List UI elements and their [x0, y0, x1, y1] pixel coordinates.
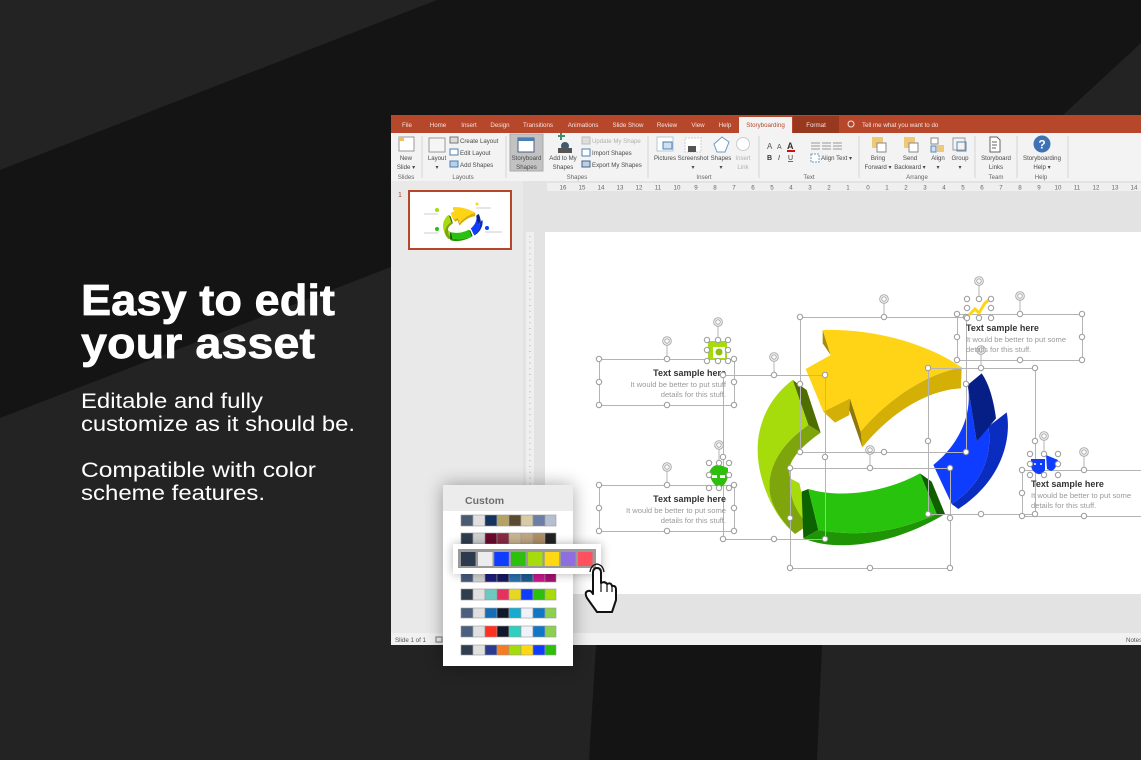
title bar with tabs: Insert — [461, 122, 477, 129]
horizontal ruler: 2 — [827, 184, 831, 192]
title bar with tabs: Transitions — [523, 122, 553, 129]
ribbon labels: Layouts — [452, 174, 474, 181]
horizontal ruler: 3 — [923, 184, 927, 192]
ribbon labels: Team — [989, 174, 1003, 181]
scheme row 2 — [461, 533, 556, 544]
ribbon labels: Pictures — [654, 155, 676, 162]
description text: customize as it should be. — [81, 413, 355, 436]
ribbon labels: Arrange — [906, 174, 928, 181]
horizontal ruler: 14 — [598, 184, 605, 192]
ribbon labels: ▾ — [435, 164, 439, 171]
horizontal ruler: 8 — [1018, 184, 1022, 192]
colour scheme picker panel — [443, 485, 601, 666]
ribbon labels: Insert — [696, 174, 712, 181]
title bar with tabs: Design — [490, 122, 510, 129]
ribbon labels: Shapes — [516, 164, 537, 171]
horizontal ruler: 12 — [1093, 184, 1100, 192]
horizontal ruler: 13 — [1112, 184, 1119, 192]
horizontal ruler: 4 — [789, 184, 793, 192]
ribbon icons: ? — [1038, 138, 1046, 152]
text block: bottom left: Text sample here — [653, 494, 726, 504]
ribbon — [391, 133, 1141, 181]
ribbon labels: ▾ — [936, 164, 940, 171]
icon: yellow growth line — [969, 300, 989, 315]
text block: top right — [966, 323, 1066, 354]
3D cycle arrows — [758, 330, 1008, 545]
ribbon labels: Slides — [398, 174, 414, 181]
scheme row 4 — [461, 572, 556, 582]
ribbon labels: Slide ▾ — [397, 164, 415, 171]
horizontal ruler: 8 — [713, 184, 717, 192]
ribbon labels: Screenshot — [678, 155, 709, 162]
thumbnail panel — [391, 181, 523, 633]
text block: top left: details for this stuff. — [661, 390, 726, 399]
horizontal ruler: 15 — [579, 184, 586, 192]
ribbon labels: Add to My — [549, 155, 578, 162]
selection boxes — [600, 285, 1141, 568]
ribbon labels: Edit Layout — [460, 150, 491, 157]
ribbon icons: A — [787, 141, 794, 151]
title bar with tabs — [391, 115, 1141, 133]
ribbon labels: ▾ — [958, 164, 962, 171]
horizontal ruler: 11 — [1074, 184, 1081, 192]
ribbon labels: Add Shapes — [460, 162, 493, 169]
text block: top left: It would be better to put stuff — [630, 380, 727, 389]
description text: Compatible with color — [81, 459, 316, 482]
scheme row 7 — [461, 626, 556, 637]
text block: top left — [630, 368, 727, 399]
horizontal ruler — [547, 183, 1141, 192]
text block: bottom right — [1031, 479, 1131, 510]
title bar with tabs: Home — [430, 122, 447, 129]
text block: bottom left — [626, 494, 726, 525]
title bar with tabs: File — [402, 122, 413, 129]
ribbon labels: ▾ — [691, 164, 695, 171]
horizontal ruler: 2 — [904, 184, 908, 192]
icon: pointing hand cursor — [586, 564, 616, 612]
heading: your asset — [81, 319, 315, 368]
ribbon labels: Storyboard — [981, 155, 1011, 162]
ribbon labels: Help ▾ — [1033, 164, 1051, 171]
ribbon labels: Group — [952, 155, 969, 162]
description text: scheme features. — [81, 482, 265, 505]
highlighted scheme row — [453, 544, 601, 574]
horizontal ruler: 0 — [866, 184, 870, 192]
vertical ruler — [526, 232, 534, 594]
ribbon labels: Link — [737, 164, 750, 171]
ribbon labels: Storyboard — [512, 155, 541, 162]
horizontal ruler: 1 — [885, 184, 889, 192]
thumbnail panel: 1 — [398, 192, 402, 199]
ribbon labels: Shapes — [711, 155, 731, 162]
ribbon labels: Links — [989, 164, 1003, 171]
ribbon labels: Insert — [735, 155, 751, 162]
title bar with tabs: Review — [657, 122, 678, 129]
selection handles — [596, 296, 1087, 571]
horizontal ruler: 3 — [808, 184, 812, 192]
ribbon labels: Update My Shape — [592, 138, 641, 145]
description text — [81, 390, 355, 505]
ribbon labels: Align — [931, 155, 945, 162]
title bar with tabs: Storyboarding — [746, 122, 785, 129]
status bar — [391, 633, 1141, 645]
ribbon labels: Import Shapes — [592, 150, 632, 157]
horizontal ruler: 16 — [560, 184, 567, 192]
scheme row 1 — [461, 515, 556, 526]
text block: bottom right: details for this stuff. — [1031, 501, 1096, 510]
ribbon labels: Backward ▾ — [894, 164, 926, 171]
scheme row 5 — [461, 589, 556, 600]
scheme row 6 — [461, 608, 556, 618]
text block: top right: details for this stuff. — [966, 345, 1031, 354]
ribbon icons: B — [767, 155, 772, 162]
heading: Easy to edit — [81, 276, 335, 325]
status bar: Slide 1 of 1 — [395, 637, 427, 644]
ribbon labels: Forward ▾ — [864, 164, 892, 171]
ribbon icons: I — [778, 155, 780, 162]
ribbon labels: Bring — [871, 155, 885, 162]
ribbon labels: Text — [803, 174, 815, 181]
text block: bottom left: It would be better to put some — [626, 506, 726, 515]
ribbon labels: Storyboarding — [1023, 155, 1061, 162]
ribbon icons: A — [767, 142, 773, 151]
horizontal ruler: 6 — [751, 184, 755, 192]
title bar with tabs: Tell me what you want to do — [862, 122, 939, 129]
title bar with tabs: View — [691, 122, 705, 129]
application window — [391, 115, 1141, 645]
text block: bottom left: details for this stuff. — [661, 516, 726, 525]
ribbon labels: Shapes — [567, 174, 587, 181]
scheme row 8 — [461, 645, 556, 655]
title bar with tabs: Slide Show — [613, 122, 644, 129]
icon: green face — [709, 465, 728, 488]
ribbon labels: ▾ — [719, 164, 723, 171]
title bar with tabs: Format — [806, 122, 826, 129]
icon: lime chart — [708, 341, 727, 360]
text block: bottom right: It would be better to put some — [1031, 491, 1131, 500]
horizontal ruler: 5 — [770, 184, 774, 192]
text block: top right: Text sample here — [966, 323, 1039, 333]
ribbon icons: U — [788, 155, 793, 162]
ribbon labels: Export My Shapes — [592, 162, 642, 169]
horizontal ruler: 9 — [1037, 184, 1041, 192]
horizontal ruler: 10 — [674, 184, 681, 192]
horizontal ruler: 9 — [694, 184, 698, 192]
title bar with tabs: Animations — [568, 122, 598, 129]
horizontal ruler: 12 — [636, 184, 643, 192]
ribbon labels: Help — [1035, 174, 1048, 181]
text block: bottom right: Text sample here — [1031, 479, 1104, 489]
horizontal ruler: 4 — [942, 184, 946, 192]
horizontal ruler: 7 — [732, 184, 736, 192]
slide canvas — [545, 232, 1141, 594]
horizontal ruler: 1 — [846, 184, 850, 192]
picker heading: Custom — [465, 495, 504, 507]
description text: Editable and fully — [81, 390, 264, 413]
ribbon labels — [397, 138, 1061, 181]
heading — [81, 276, 335, 368]
ribbon icons: A — [777, 144, 782, 151]
text block: top left: Text sample here — [653, 368, 726, 378]
horizontal ruler: 14 — [1131, 184, 1138, 192]
ribbon labels: Layout — [428, 155, 446, 162]
horizontal ruler: 10 — [1055, 184, 1062, 192]
horizontal ruler: 13 — [617, 184, 624, 192]
horizontal ruler: 6 — [980, 184, 984, 192]
rotation handles — [663, 277, 1088, 471]
text block: top right: It would be better to put some — [966, 335, 1066, 344]
horizontal ruler: 11 — [655, 184, 662, 192]
ribbon labels: Shapes — [553, 164, 573, 171]
ribbon labels: Send — [903, 155, 917, 162]
ribbon labels: Align Text ▾ — [821, 155, 852, 162]
ribbon labels: Create Layout — [460, 138, 499, 145]
ribbon labels: New — [400, 155, 413, 162]
icon: blue theatre masks — [1031, 455, 1058, 474]
horizontal ruler: 5 — [961, 184, 965, 192]
title bar with tabs: Help — [719, 122, 732, 129]
ribbon icons — [399, 133, 1050, 167]
horizontal ruler: 7 — [999, 184, 1003, 192]
